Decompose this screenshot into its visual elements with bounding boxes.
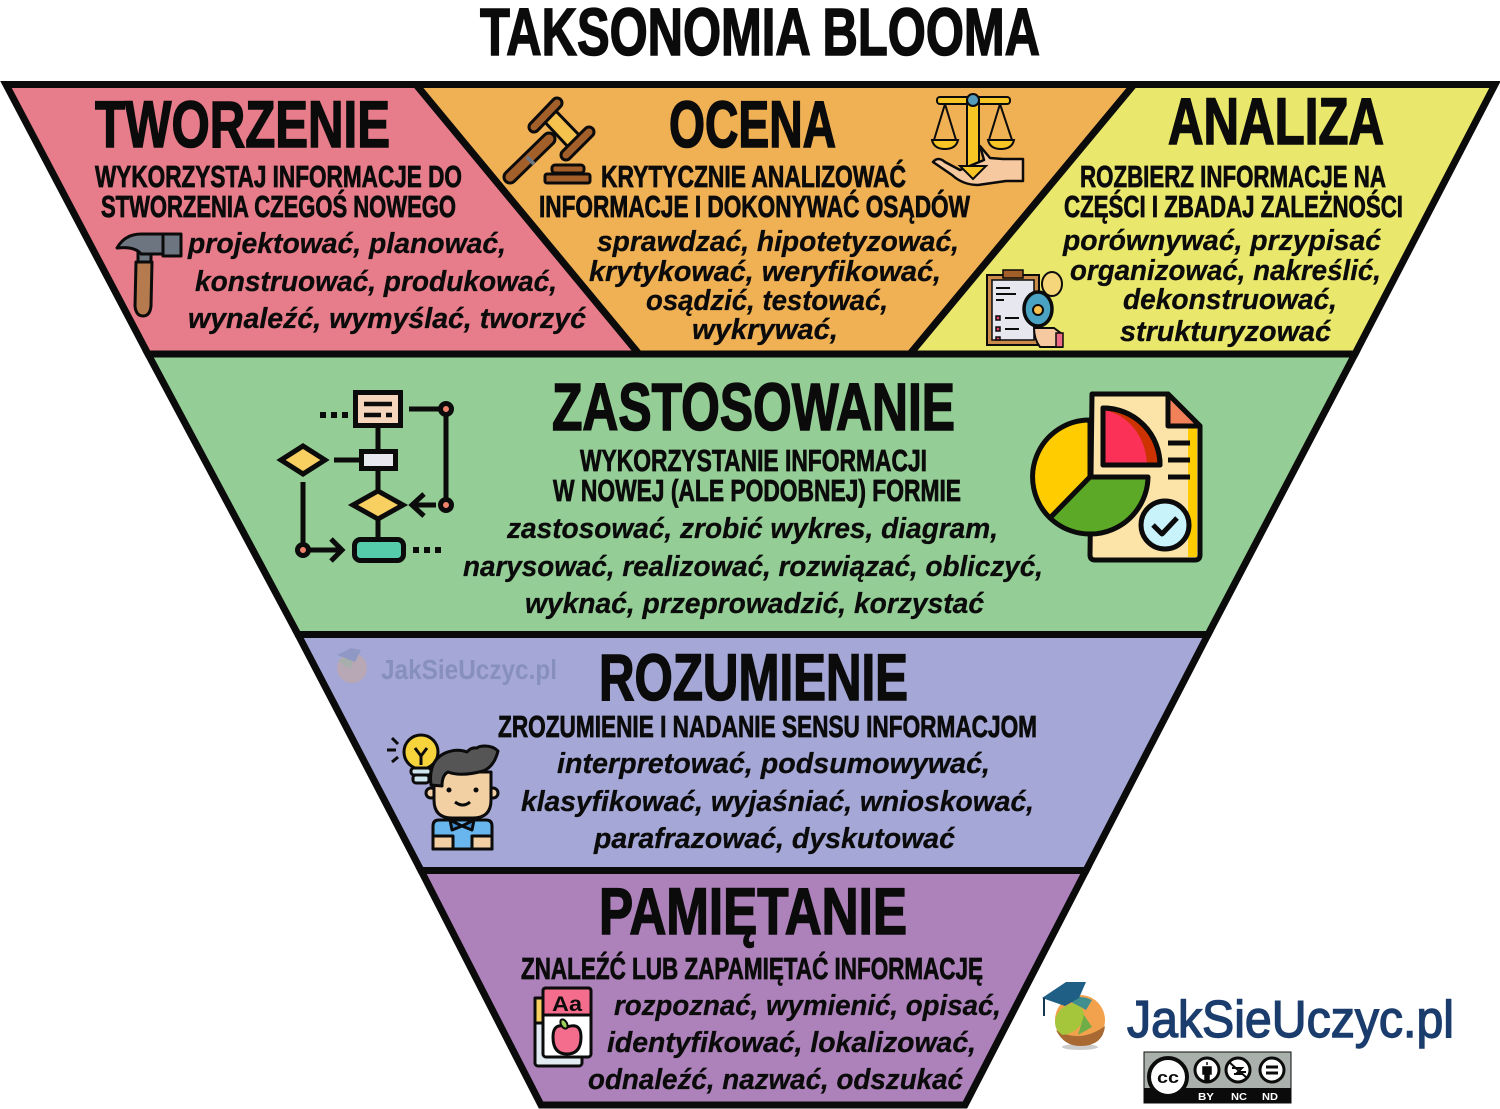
icon: scales <box>932 94 1023 185</box>
license badge: CC BY NC ND <box>1144 1052 1291 1103</box>
verbs: rozumienie: klasyfikować, wyjaśniać, wnioskować, <box>521 786 1034 818</box>
verbs: tworzenie: wynaleźć, wymyślać, tworzyć <box>188 303 587 335</box>
verbs: rozumienie <box>521 748 1034 855</box>
verbs: analiza: organizować, nakreślić, <box>1070 255 1381 287</box>
icon: hammer <box>117 234 181 316</box>
verbs: pamietanie: odnaleźć, nazwać, odszukać <box>588 1064 964 1096</box>
logo globe <box>1042 982 1105 1050</box>
license badge: CC BY NC ND: ND <box>1262 1092 1278 1103</box>
panel: zastosowanie <box>148 354 1355 634</box>
heading: analiza: ANALIZA <box>1168 84 1384 158</box>
panel: rozumienie <box>298 634 1208 870</box>
heading: pamietanie: PAMIĘTANIE <box>599 874 907 948</box>
heading: tworzenie: TWORZENIE <box>95 87 390 161</box>
license badge: CC BY NC ND: NC <box>1231 1092 1247 1103</box>
verbs: rozumienie: parafrazować, dyskutować <box>593 823 956 855</box>
verbs: pamietanie <box>588 990 1001 1096</box>
description: analiza <box>1064 159 1403 224</box>
license badge: CC BY NC ND: cc <box>1157 1068 1179 1087</box>
verbs: zastosowanie: wyknać, przeprowadzić, korzystać <box>525 588 985 620</box>
description: rozumienie: ZROZUMIENIE I NADANIE SENSU INFORMACJOM <box>498 709 1037 744</box>
watermark logo <box>337 648 557 685</box>
verbs: zastosowanie: zastosować, zrobić wykres, diagram, <box>506 513 998 545</box>
verbs: pamietanie: identyfikować, lokalizować, <box>607 1027 976 1059</box>
verbs: rozumienie: interpretować, podsumowywać, <box>557 748 990 780</box>
verbs: analiza <box>1062 225 1382 348</box>
logo: JakSieUczyc.pl <box>1042 982 1454 1050</box>
license badge: CC BY NC ND: BY <box>1198 1092 1214 1103</box>
verbs: ocena: krytykować, weryfikować, <box>589 256 941 288</box>
verbs: tworzenie: projektować, planować, <box>187 228 506 260</box>
icon: clipboard with magnifier <box>987 270 1063 347</box>
verbs: analiza: strukturyzować <box>1120 316 1332 348</box>
heading: zastosowanie: ZASTOSOWANIE <box>552 370 955 445</box>
description: tworzenie: STWORZENIA CZEGOŚ NOWEGO <box>101 188 456 224</box>
panel: analiza <box>910 84 1495 354</box>
icon: chart document <box>1033 394 1200 560</box>
watermark logo: JakSieUczyc.pl <box>381 654 557 685</box>
panel: pamietanie <box>421 870 1086 1105</box>
description: analiza: ROZBIERZ INFORMACJE NA <box>1080 159 1386 194</box>
verbs: ocena: sprawdzać, hipotetyzować, <box>597 226 959 258</box>
description: ocena <box>539 158 971 224</box>
verbs: zastosowanie: narysować, realizować, rozwiązać, obliczyć, <box>463 551 1043 583</box>
verbs: analiza: dekonstruować, <box>1123 284 1337 316</box>
icon: gavel <box>510 103 590 183</box>
description: ocena: KRYTYCZNIE ANALIZOWAĆ <box>601 158 906 194</box>
description: ocena: INFORMACJE I DOKONYWAĆ OSĄDÓW <box>539 188 971 224</box>
icon: alphabet book with apple <box>535 988 591 1066</box>
description: tworzenie: WYKORZYSTAJ INFORMACJE DO <box>95 159 462 194</box>
icon: boy with light bulb <box>387 735 498 849</box>
panel: ocena <box>416 84 1134 354</box>
logo wordmark: JakSieUczyc.pl <box>1127 991 1454 1049</box>
verbs: tworzenie: konstruować, produkować, <box>195 266 557 298</box>
icon: flowchart <box>281 392 452 561</box>
icon: alphabet book with apple: Aa <box>552 993 582 1016</box>
description: pamietanie: ZNALEŹĆ LUB ZAPAMIĘTAĆ INFORMACJĘ <box>521 950 983 986</box>
description: zastosowanie <box>553 443 961 508</box>
verbs: tworzenie <box>187 228 587 335</box>
heading: ocena: OCENA <box>669 87 836 161</box>
heading: rozumienie: ROZUMIENIE <box>599 640 908 714</box>
description: tworzenie <box>95 159 462 224</box>
panel: tworzenie <box>6 84 639 354</box>
verbs: pamietanie: rozpoznać, wymienić, opisać, <box>614 990 1001 1022</box>
description: zastosowanie: WYKORZYSTANIE INFORMACJI <box>580 443 927 478</box>
verbs: ocena <box>589 226 959 346</box>
verbs: ocena: osądzić, testować, <box>646 285 888 317</box>
description: zastosowanie: W NOWEJ (ALE PODOBNEJ) FORMIE <box>553 473 961 508</box>
verbs: zastosowanie <box>463 513 1043 620</box>
verbs: analiza: porównywać, przypisać <box>1062 225 1382 257</box>
verbs: ocena: wykrywać, <box>692 314 838 346</box>
